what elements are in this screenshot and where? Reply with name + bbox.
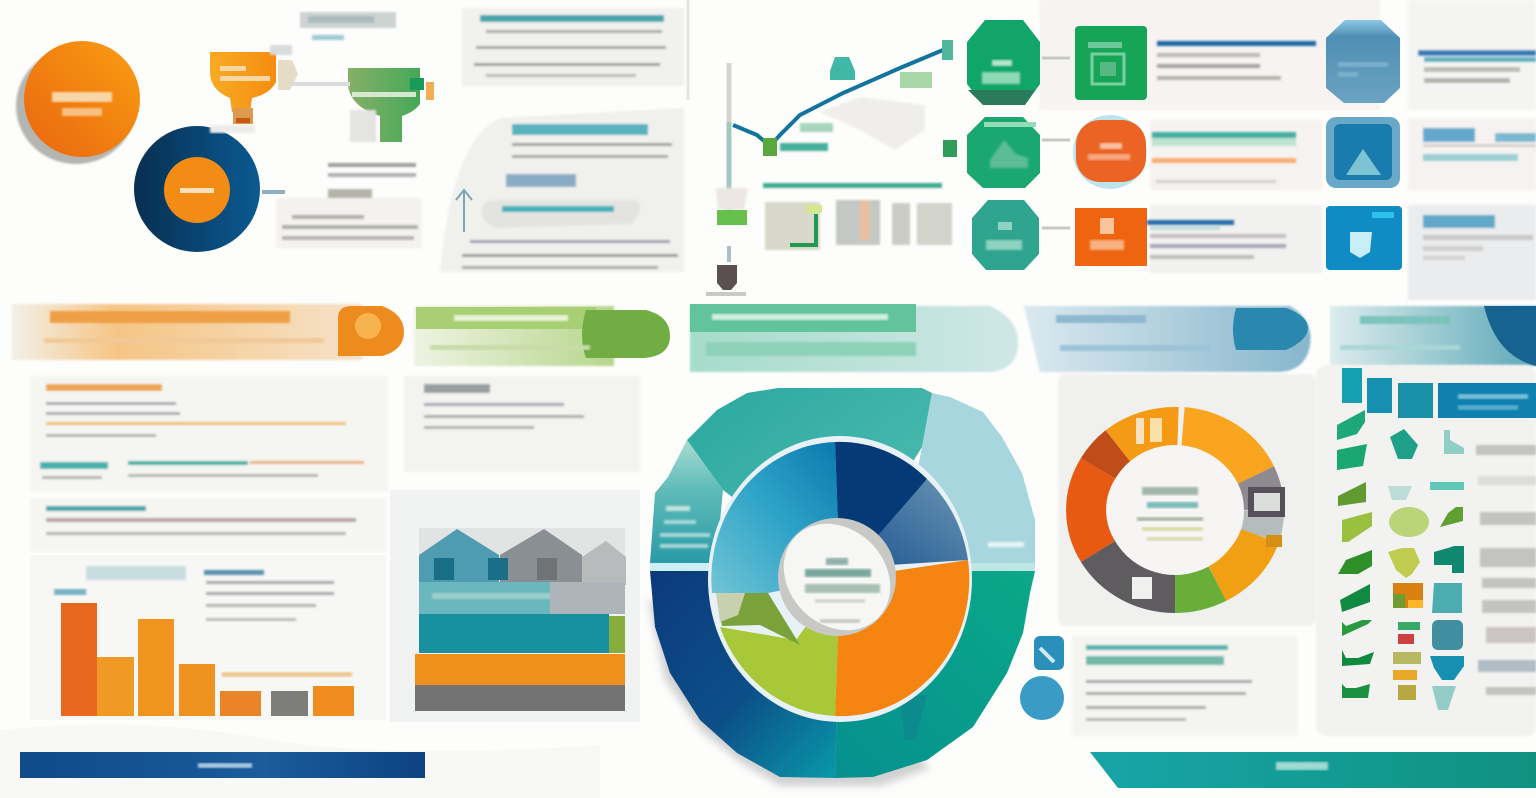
panel: landscape stripes	[390, 490, 640, 722]
outer ring	[650, 388, 1035, 778]
icon: orange circle	[1073, 115, 1147, 189]
icon: thumbnails	[765, 200, 952, 250]
panel: note card two	[440, 108, 684, 272]
panel: far right icon list	[1316, 365, 1536, 736]
icon: orange funnel	[210, 45, 298, 133]
icon: green badge 1	[967, 20, 1040, 105]
icon: teal badge 3	[972, 200, 1039, 270]
chart: stripes	[415, 582, 625, 711]
icon: blue tile 1	[1326, 20, 1400, 103]
icon: green funnel	[348, 68, 434, 142]
icon: navy ring with orange core	[134, 126, 260, 252]
panel: card A	[30, 376, 388, 492]
icon: sketch card	[820, 97, 925, 150]
chart: trend line	[733, 40, 957, 157]
icon: blue tile 3	[1326, 206, 1402, 270]
text block: note	[1072, 636, 1298, 736]
icon: blue tile 2	[1326, 117, 1400, 188]
panel: upper centre notes	[440, 0, 688, 272]
icon: houses	[419, 528, 626, 585]
icon: blue bubbles	[1020, 636, 1064, 720]
panel: header ribbons	[12, 304, 1536, 372]
inner ring	[708, 436, 972, 722]
icon: vertical connector	[456, 190, 472, 232]
heading: blue ribbon	[1024, 306, 1311, 372]
centre label	[762, 502, 912, 652]
icon: mid column	[1388, 429, 1429, 700]
heading: orange ribbon	[12, 304, 404, 360]
text block: row 2	[1152, 132, 1296, 183]
panel: lower right note	[1020, 636, 1536, 788]
panel: top right matrix	[967, 0, 1536, 300]
icon: green badge 2	[967, 117, 1040, 188]
heading: teal title	[1342, 368, 1536, 418]
heading: teal ribbon	[690, 304, 1018, 372]
panel: lower left text cards	[20, 376, 640, 778]
icon: segment glyphs	[1132, 418, 1285, 599]
text block: ring label	[660, 506, 1024, 548]
text block: chart caption	[763, 123, 942, 188]
heading: green ribbon	[414, 306, 670, 366]
footer bar: navy	[20, 752, 425, 778]
text block: far right rows	[1408, 0, 1536, 300]
text block: process note	[276, 163, 422, 248]
donut chart: segments	[1086, 427, 1264, 593]
icon: orange square	[1075, 208, 1147, 266]
donut chart: central	[648, 388, 1035, 786]
footer bar: teal	[1090, 752, 1536, 788]
panel: small orange donut	[1058, 374, 1316, 626]
heading: far right ribbon	[1330, 306, 1536, 366]
icon: bucket and pin	[706, 188, 748, 296]
panel: card B	[404, 376, 640, 472]
icon: large orange circle	[24, 41, 140, 157]
text block: right column lines	[1476, 445, 1536, 695]
bar chart: orange bars	[30, 555, 386, 720]
panel: note card one	[462, 8, 684, 86]
icon: teal column	[1430, 430, 1464, 710]
centre label	[1107, 445, 1243, 575]
panel: upper line chart	[706, 40, 957, 296]
text block: row 1	[1157, 41, 1316, 80]
icon: green column	[1337, 410, 1374, 698]
text block: row 3	[1147, 220, 1286, 259]
text block: chart note	[86, 566, 334, 621]
panel: top left process diagram	[16, 12, 434, 252]
panel: card C	[30, 498, 386, 552]
icon: green square	[1075, 26, 1147, 100]
text block: top caption	[300, 12, 396, 40]
